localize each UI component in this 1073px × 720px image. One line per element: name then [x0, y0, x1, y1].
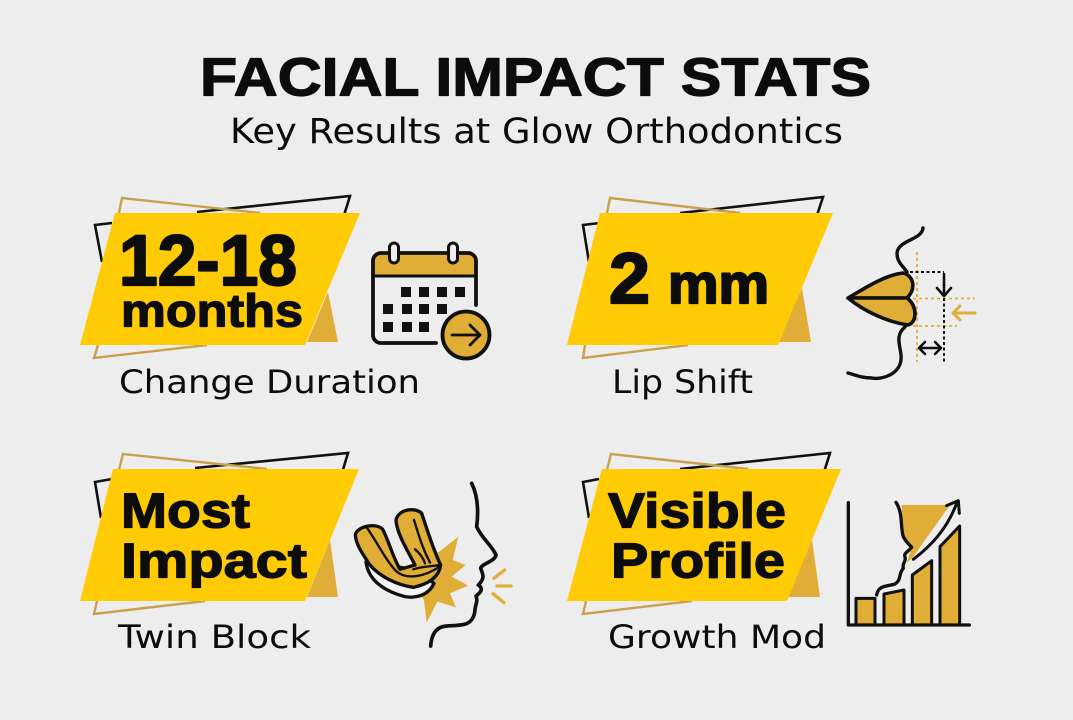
stat: visible profile — [608, 484, 786, 588]
icon: lips profile — [848, 228, 975, 378]
banner — [80, 213, 360, 345]
label: growth mod: Growth Mod — [608, 618, 826, 656]
panel: change duration — [80, 196, 490, 401]
panel: lip shift — [567, 197, 975, 401]
label: change duration: Change Duration — [119, 363, 420, 401]
label: lip shift: Lip Shift — [612, 363, 753, 401]
stat: 12-18 months: months — [121, 284, 303, 336]
panel: twin block — [80, 453, 511, 656]
stat: 2 mm: mm — [668, 252, 769, 315]
banner fold — [307, 540, 338, 597]
stat: most impact: Most — [121, 484, 250, 538]
subtitle: Key Results at Glow Orthodontics — [230, 112, 843, 152]
stat: 12-18 months: 12-18 — [119, 222, 297, 301]
stat: 2 mm — [609, 240, 769, 319]
stat: most impact — [121, 484, 307, 588]
banner — [567, 213, 833, 345]
title: FACIAL IMPACT STATS — [200, 48, 871, 108]
banner fold — [307, 292, 338, 342]
banner frames — [583, 197, 823, 358]
stat: 12-18 months — [119, 222, 303, 336]
banner fold — [788, 540, 820, 597]
stat: visible profile: Visible — [608, 484, 786, 538]
stat: visible profile: Profile — [611, 534, 785, 588]
panel: growth mod — [567, 453, 969, 656]
stat: 2 mm: 2 — [609, 240, 650, 319]
banner — [80, 469, 359, 601]
icon: calendar — [373, 243, 490, 358]
banner frames — [583, 453, 830, 614]
banner — [567, 469, 841, 601]
label: twin block: Twin Block — [117, 618, 312, 656]
banner fold — [778, 288, 811, 342]
banner frames — [94, 196, 350, 358]
icon: twin block appliance and face — [355, 483, 511, 646]
banner frames — [94, 453, 348, 614]
stat: most impact: Impact — [121, 534, 307, 588]
icon: growth chart with profile — [848, 501, 969, 625]
